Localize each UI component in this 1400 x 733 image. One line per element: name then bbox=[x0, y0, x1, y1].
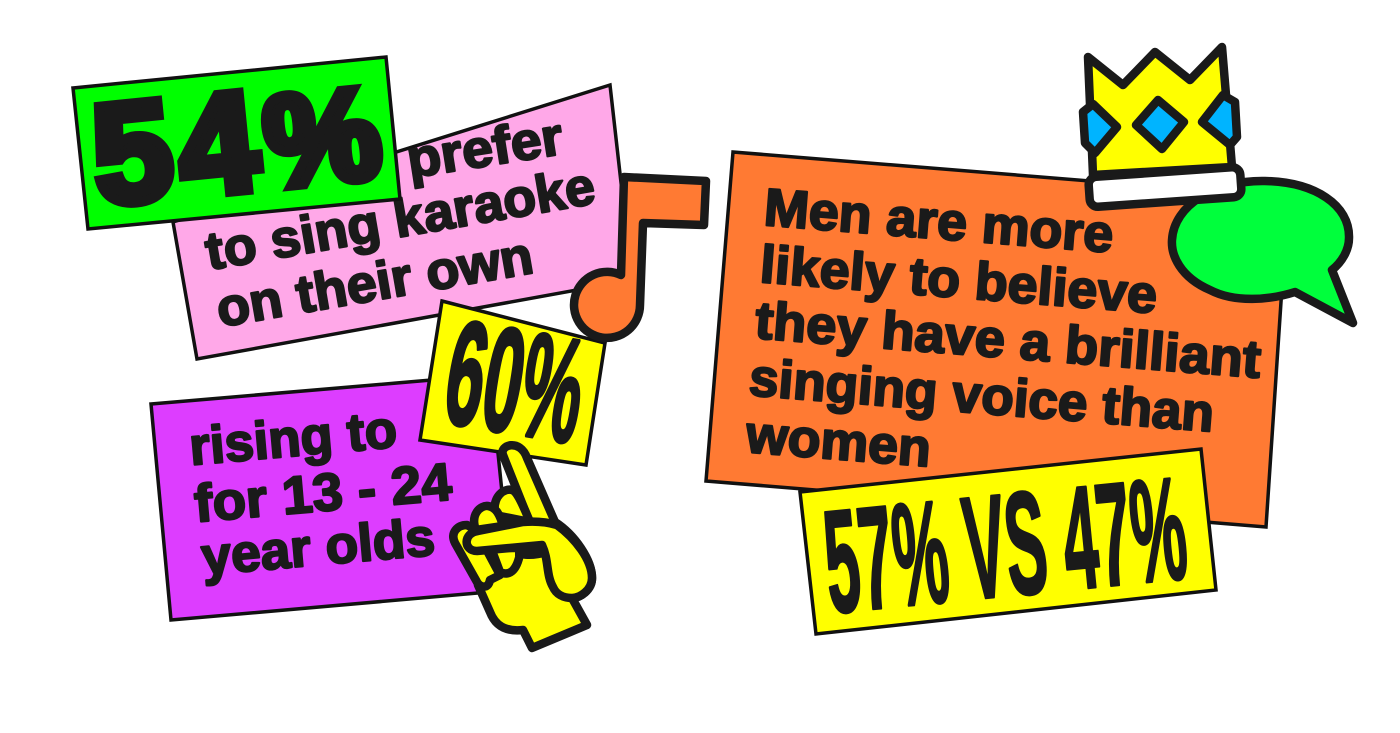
panel: 57% vs 47% bbox=[800, 446, 1216, 644]
little finger bbox=[453, 525, 500, 587]
ring finger bbox=[495, 490, 530, 522]
pink box text: on their own bbox=[212, 226, 537, 339]
panel: rising to for 13-24 year olds bbox=[151, 375, 512, 620]
pink box text: to sing karaoke bbox=[201, 157, 599, 282]
pink box bbox=[173, 85, 632, 359]
curled finger bbox=[491, 548, 521, 574]
purple box text bbox=[187, 400, 455, 587]
yellow box bbox=[420, 301, 605, 465]
orange box text bbox=[743, 178, 1263, 478]
right gem bbox=[1202, 95, 1237, 145]
pink box text: prefer bbox=[403, 107, 567, 190]
yellow box bbox=[800, 449, 1216, 634]
orange box text: women bbox=[743, 405, 933, 478]
icon: speech bubble bbox=[1172, 181, 1353, 323]
left gem bbox=[1083, 104, 1117, 153]
orange box text: likely to believe bbox=[758, 235, 1159, 325]
centre gem bbox=[1136, 100, 1184, 149]
orange box text: they have a brilliant bbox=[753, 291, 1263, 390]
purple box text: year olds bbox=[199, 508, 437, 587]
hand palm and index finger bbox=[470, 445, 592, 648]
54% figure: 4 bbox=[171, 61, 265, 227]
purple box text: rising to bbox=[187, 400, 399, 477]
icon: crown bbox=[1083, 47, 1242, 207]
panel: 60% stat bbox=[420, 290, 605, 475]
panel: men vs women bbox=[706, 152, 1288, 527]
crown band bbox=[1088, 167, 1242, 207]
green box bbox=[73, 57, 400, 229]
icon: music note bbox=[574, 177, 706, 338]
panel: 54% stat bbox=[73, 49, 400, 236]
thumb bbox=[467, 522, 592, 598]
middle finger bbox=[474, 506, 503, 530]
purple box bbox=[151, 375, 512, 620]
pink box text bbox=[201, 107, 599, 339]
shadow under thumb bbox=[515, 544, 548, 559]
crown body bbox=[1088, 47, 1232, 175]
purple box text: for 13 - 24 bbox=[192, 453, 455, 534]
54% figure: % bbox=[257, 59, 387, 216]
60% figure: 60% bbox=[435, 290, 596, 475]
icon: pointing hand bbox=[453, 445, 592, 648]
panel: prefer to sing karaoke alone bbox=[173, 85, 632, 359]
orange box bbox=[706, 152, 1288, 527]
orange box text: singing voice than bbox=[747, 348, 1216, 444]
54% figure: 5 bbox=[85, 70, 180, 236]
orange box text: Men are more bbox=[762, 178, 1116, 264]
